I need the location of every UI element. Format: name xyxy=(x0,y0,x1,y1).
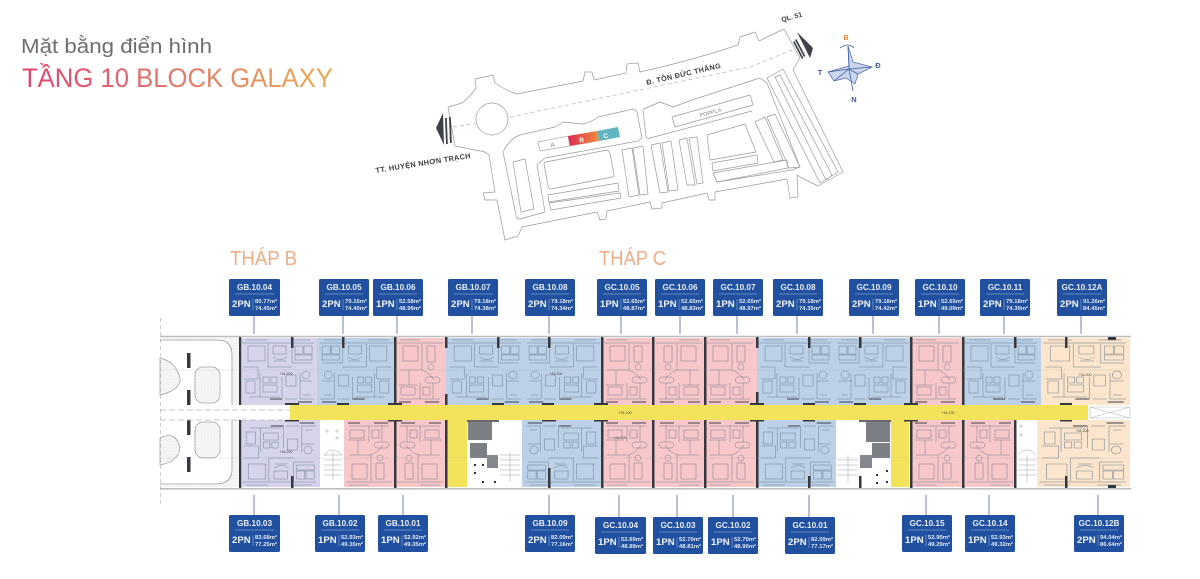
unit card GC.10.12A: GC.10.12A xyxy=(1062,283,1103,292)
unit card GC.10.11: 74.39m² xyxy=(1006,305,1028,312)
unit card GC.10.10: 49.09m² xyxy=(941,305,963,312)
core right xyxy=(837,421,891,484)
unit card GC.10.06: 52.65m² xyxy=(681,298,703,305)
unit card GC.10.02: GC.10.02 xyxy=(715,521,751,530)
unit card GB.10.07 xyxy=(448,279,498,334)
block marker A B C: C xyxy=(603,133,609,140)
unit card GC.10.03: GC.10.03 xyxy=(660,521,696,530)
level labels: +34.200 xyxy=(1078,373,1092,377)
unit card GB.10.01: 52.92m² xyxy=(404,534,426,541)
unit card GC.10.08: 74.35m² xyxy=(799,305,821,312)
entry plaza xyxy=(160,338,240,487)
unit card GC.10.07 xyxy=(713,279,763,334)
unit card GB.10.04: GB.10.04 xyxy=(237,283,272,292)
unit card GC.10.03 xyxy=(653,495,703,554)
unit card GC.10.02: 1PN xyxy=(711,537,730,548)
unit card GC.10.14 xyxy=(965,495,1015,552)
title xyxy=(21,35,333,93)
floor plan xyxy=(160,318,1131,505)
unit card GC.10.08: 2PN xyxy=(776,299,795,310)
unit card GC.10.06: GC.10.06 xyxy=(662,283,698,292)
heading: tower C: THÁP C xyxy=(599,247,666,270)
unit card GC.10.14: GC.10.14 xyxy=(972,519,1008,528)
block marker A B C xyxy=(538,127,620,151)
level labels: +34.100 xyxy=(618,411,632,415)
unit card GC.10.11: GC.10.11 xyxy=(988,283,1023,292)
block marker A B C: A xyxy=(550,142,556,149)
unit card GC.10.14: 52.93m² xyxy=(991,534,1013,541)
unit card GC.10.12A xyxy=(1057,279,1107,334)
unit card GC.10.01: 82.09m² xyxy=(811,536,833,543)
unit card GC.10.05 xyxy=(597,279,647,334)
unit card GB.10.05: 79.16m² xyxy=(345,298,367,305)
corridor xyxy=(160,405,1130,420)
unit card GC.10.04: 48.89m² xyxy=(621,543,643,550)
level labels: +34.200 xyxy=(279,450,293,454)
unit card GB.10.06: 48.99m² xyxy=(399,305,421,312)
unit card GC.10.11 xyxy=(980,279,1030,334)
unit card GB.10.02: 52.93m² xyxy=(341,534,363,541)
unit card GB.10.01 xyxy=(378,495,428,552)
unit card GB.10.09: GB.10.09 xyxy=(532,519,568,528)
unit card GB.10.02: 49.35m² xyxy=(341,541,363,548)
unit card GB.10.01: GB.10.01 xyxy=(385,519,421,528)
unit card GC.10.07: 52.65m² xyxy=(739,298,761,305)
unit card GC.10.06: 1PN xyxy=(658,299,677,310)
unit card GB.10.08: 79.18m² xyxy=(551,298,573,305)
unit card GC.10.01: 77.17m² xyxy=(811,543,833,550)
unit card GC.10.15: 1PN xyxy=(905,535,924,546)
unit card GB.10.07: 74.38m² xyxy=(474,305,496,312)
level labels xyxy=(279,372,1092,454)
unit card GC.10.04: 1PN xyxy=(598,537,617,548)
unit card GB.10.03: GB.10.03 xyxy=(237,519,272,528)
unit card GB.10.08: 74.34m² xyxy=(551,305,573,312)
unit card GC.10.09 xyxy=(849,279,899,334)
unit card GB.10.07: 2PN xyxy=(451,299,470,310)
unit card GC.10.01: 2PN xyxy=(788,537,807,548)
unit card GB.10.09: 77.16m² xyxy=(551,541,573,548)
unit card GC.10.12B: 2PN xyxy=(1077,535,1096,546)
unit card GB.10.07: GB.10.07 xyxy=(455,283,491,292)
unit card GB.10.03: 2PN xyxy=(232,535,251,546)
unit card GB.10.06: 52.58m² xyxy=(399,298,421,305)
unit card GC.10.08: GC.10.08 xyxy=(780,283,816,292)
unit card GB.10.05: 74.40m² xyxy=(345,305,367,312)
level labels: +34.200 xyxy=(279,372,293,376)
unit card GC.10.02: 52.70m² xyxy=(734,536,756,543)
unit card GC.10.08 xyxy=(773,279,823,334)
structural columns xyxy=(239,337,1116,488)
unit card GC.10.14: 49.32m² xyxy=(991,541,1013,548)
unit card GC.10.04: GC.10.04 xyxy=(603,521,638,530)
unit card GC.10.09: 79.18m² xyxy=(875,298,897,305)
unit card GC.10.09: 74.42m² xyxy=(875,305,897,312)
unit card GC.10.07: GC.10.07 xyxy=(720,283,756,292)
unit card GC.10.05: 48.87m² xyxy=(623,305,645,312)
unit card GB.10.07: 79.18m² xyxy=(474,298,496,305)
level labels: +34.200 xyxy=(613,436,627,440)
unit card GB.10.04: 74.45m² xyxy=(255,305,277,312)
title: TẦNG 10 BLOCK GALAXY xyxy=(22,62,333,93)
unit card GC.10.12B: 94.04m² xyxy=(1100,534,1122,541)
unit card GC.10.12B: 86.64m² xyxy=(1100,541,1122,548)
unit card GC.10.12B: GC.10.12B xyxy=(1079,519,1120,528)
unit card GB.10.06 xyxy=(373,279,423,334)
unit card GB.10.08 xyxy=(525,279,575,334)
unit card GC.10.14: 1PN xyxy=(968,535,987,546)
unit card GB.10.09 xyxy=(525,495,575,552)
unit card GB.10.08: GB.10.08 xyxy=(532,283,568,292)
unit card GB.10.09: 82.09m² xyxy=(551,534,573,541)
compass: B xyxy=(843,35,849,42)
unit card GB.10.03: 77.25m² xyxy=(255,541,277,548)
road label: Nhơn Trạch: TT. HUYỆN NHƠN TRẠCH xyxy=(375,151,471,175)
unit card GC.10.07: 48.97m² xyxy=(739,305,761,312)
unit card GC.10.15: 52.90m² xyxy=(928,534,950,541)
unit card GB.10.01: 1PN xyxy=(381,535,400,546)
unit card GC.10.02: 48.90m² xyxy=(734,543,756,550)
unit card GB.10.05 xyxy=(319,279,369,334)
unit card GB.10.02: 1PN xyxy=(318,535,337,546)
unit card GB.10.06: 1PN xyxy=(376,299,395,310)
unit card GB.10.08: 2PN xyxy=(528,299,547,310)
unit card GC.10.15: 49.29m² xyxy=(928,541,950,548)
apartments bottom row xyxy=(240,420,1130,487)
level labels: +34.200 xyxy=(1075,429,1089,433)
unit card GC.10.01 xyxy=(785,495,835,554)
stair right xyxy=(1018,425,1036,483)
unit card GC.10.05: 52.65m² xyxy=(623,298,645,305)
unit card GB.10.04: 80.77m² xyxy=(255,298,277,305)
unit card GB.10.04: 2PN xyxy=(232,299,251,310)
unit card GC.10.15 xyxy=(902,495,952,552)
unit card GC.10.09: 2PN xyxy=(852,299,871,310)
road label: Tôn Đức Thắng: Đ. TÔN ĐỨC THẮNG xyxy=(645,61,722,87)
arrow: west direction xyxy=(436,113,452,145)
unit card GC.10.03: 48.81m² xyxy=(679,543,701,550)
unit card GC.10.06 xyxy=(655,279,705,334)
unit card GC.10.15: GC.10.15 xyxy=(909,519,945,528)
unit card GC.10.04: 52.69m² xyxy=(621,536,643,543)
unit card GB.10.06: GB.10.06 xyxy=(380,283,416,292)
unit card GC.10.01: GC.10.01 xyxy=(792,521,828,530)
unit card GC.10.08: 79.18m² xyxy=(799,298,821,305)
unit card GB.10.03 xyxy=(229,495,280,552)
block marker A B C: B xyxy=(579,137,585,144)
unit card GC.10.11: 79.18m² xyxy=(1006,298,1028,305)
unit card GC.10.12A: 91.26m² xyxy=(1083,298,1105,305)
title: Mặt bằng điển hình xyxy=(21,35,212,58)
unit card GB.10.03: 83.68m² xyxy=(255,534,277,541)
unit card GC.10.10 xyxy=(915,279,965,334)
compass: T xyxy=(818,68,823,77)
compass: N xyxy=(851,95,857,104)
site location map xyxy=(448,29,843,240)
arrow: east direction xyxy=(793,32,813,59)
grid lines xyxy=(160,370,1130,458)
unit card GC.10.04 xyxy=(595,495,646,554)
yellow lift lobby right xyxy=(891,420,909,487)
unit card GB.10.05: GB.10.05 xyxy=(326,283,362,292)
unit card GC.10.09: GC.10.09 xyxy=(856,283,892,292)
unit card GC.10.10: 1PN xyxy=(918,299,937,310)
compass: Đ xyxy=(875,61,881,70)
apartments top row xyxy=(240,338,1130,405)
heading: tower B: THÁP B xyxy=(230,247,297,270)
unit card GB.10.04 xyxy=(229,279,280,334)
unit card GC.10.02 xyxy=(708,495,758,554)
unit card GB.10.02: GB.10.02 xyxy=(322,519,358,528)
unit card GB.10.09: 2PN xyxy=(528,535,547,546)
core left xyxy=(467,421,520,483)
level labels: +34.200 xyxy=(549,372,563,376)
stair left xyxy=(324,430,342,480)
unit card GB.10.05: 2PN xyxy=(322,299,341,310)
unit card GC.10.11: 2PN xyxy=(983,299,1002,310)
unit card GC.10.12A: 84.45m² xyxy=(1083,305,1105,312)
unit card GB.10.02 xyxy=(315,495,365,552)
yellow lift lobby left xyxy=(447,420,467,487)
unit card GC.10.05: 1PN xyxy=(600,299,619,310)
compass xyxy=(818,35,881,104)
location label: park strip: POPPLA xyxy=(699,108,722,119)
unit card GC.10.07: 1PN xyxy=(716,299,735,310)
level labels: +34.100 xyxy=(941,411,955,415)
corridor door marks xyxy=(285,403,1072,422)
unit card GC.10.12A: 2PN xyxy=(1060,299,1079,310)
unit card GC.10.06: 48.83m² xyxy=(681,305,703,312)
road label: QL 51: QL. 51 xyxy=(781,12,803,24)
unit card GC.10.10: GC.10.10 xyxy=(922,283,958,292)
unit card GC.10.12B xyxy=(1074,495,1124,552)
unit card GC.10.05: GC.10.05 xyxy=(604,283,640,292)
unit card GC.10.03: 52.70m² xyxy=(679,536,701,543)
unit card GC.10.10: 52.65m² xyxy=(941,298,963,305)
unit card GB.10.01: 49.35m² xyxy=(404,541,426,548)
unit card GC.10.03: 1PN xyxy=(656,537,675,548)
